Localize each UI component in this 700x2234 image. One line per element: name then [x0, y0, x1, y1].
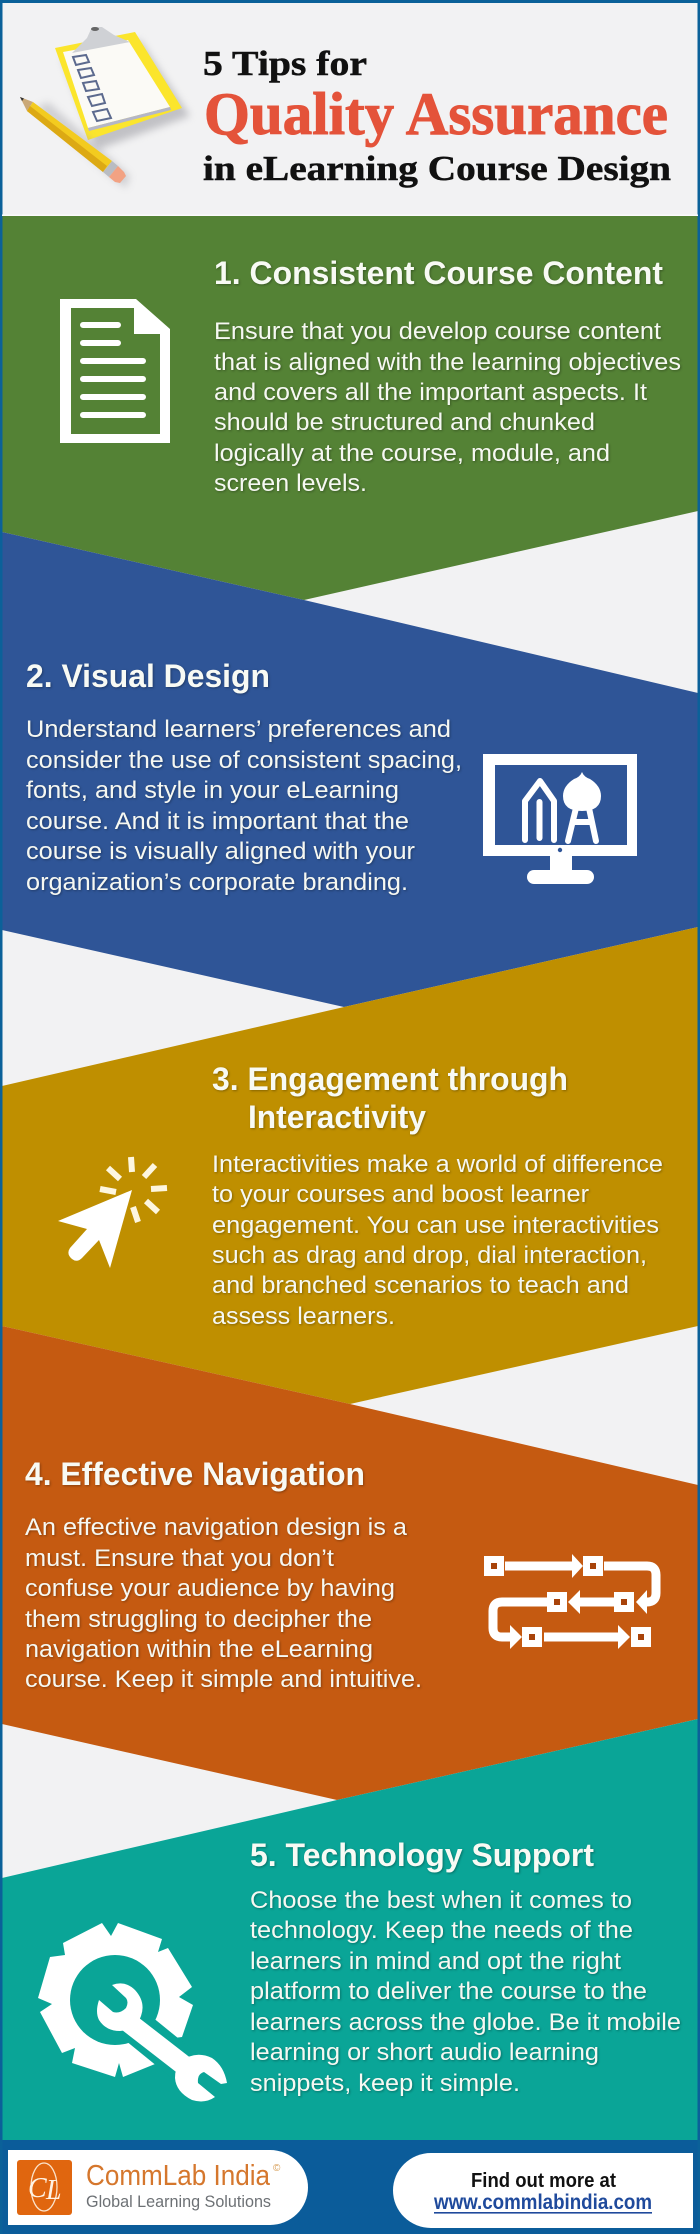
- text block: consider the use of consistent spacing,: [26, 747, 462, 774]
- icon: CL logo: [17, 2160, 72, 2215]
- text block: to your courses and boost learner: [212, 1181, 589, 1208]
- heading: Interactivity: [248, 1099, 426, 1135]
- text block: course. And it is important that the: [26, 808, 409, 835]
- text block: and covers all the important aspects. It: [214, 379, 647, 406]
- text block: snippets, keep it simple.: [250, 2070, 520, 2097]
- icon: monitor with pencil and pen: [483, 754, 637, 884]
- text block: engagement. You can use interactivities: [212, 1212, 659, 1239]
- heading: 3. Engagement through: [212, 1061, 568, 1097]
- panel: 2. visual design: [2, 532, 698, 1007]
- heading: [212, 1061, 568, 1135]
- logo panel: CommLab India: [86, 2160, 271, 2192]
- text block: [250, 1887, 681, 2097]
- icon: clipboard and pencil: [20, 27, 190, 188]
- heading: 4. Effective Navigation: [25, 1456, 365, 1492]
- text block: that is aligned with the learning objectives: [214, 349, 681, 376]
- text block: Choose the best when it comes to: [250, 1887, 632, 1914]
- text block: Ensure that you develop course content: [214, 318, 661, 345]
- icon: document: [60, 299, 170, 443]
- callout: find out more: www.commlabindia.com: [433, 2191, 652, 2214]
- text block: such as drag and drop, dial interaction,: [212, 1242, 647, 1269]
- text block: course is visually aligned with your: [26, 838, 415, 865]
- title: 5 Tips for: [203, 44, 367, 83]
- pencil: [36, 102, 130, 188]
- title: in eLearning Course Design: [203, 149, 671, 188]
- text block: [25, 1514, 422, 1693]
- text block: fonts, and style in your eLearning: [26, 777, 399, 804]
- text block: learning or short audio learning: [250, 2039, 599, 2066]
- title: Quality Assurance: [204, 81, 668, 147]
- text block: Interactivities make a world of difference: [212, 1151, 663, 1178]
- text block: Understand learners’ preferences and: [26, 716, 451, 743]
- heading: 2. Visual Design: [26, 658, 270, 694]
- text block: must. Ensure that you don’t: [25, 1545, 334, 1572]
- title: [203, 44, 671, 188]
- text block: navigation within the eLearning: [25, 1636, 373, 1663]
- text block: organization’s corporate branding.: [26, 869, 408, 896]
- text block: course. Keep it simple and intuitive.: [25, 1666, 422, 1693]
- icon: navigation flow: [484, 1554, 656, 1649]
- text block: screen levels.: [214, 470, 367, 497]
- panel: 1. consistent course content: [2, 216, 698, 600]
- text block: and branched scenarios to teach and: [212, 1272, 629, 1299]
- text block: confuse your audience by having: [25, 1575, 395, 1602]
- icon: gear and wrench: [38, 1923, 227, 2101]
- footer: [0, 2140, 700, 2234]
- heading: 5. Technology Support: [250, 1837, 594, 1873]
- text block: learners across the globe. Be it mobile: [250, 2009, 681, 2036]
- logo panel: Global Learning Solutions: [86, 2192, 271, 2211]
- logo panel: [8, 2150, 308, 2225]
- text block: [214, 318, 681, 497]
- icon: CL logo: L: [45, 2175, 62, 2206]
- panel: 3. engagement through interactivity: [2, 927, 698, 1404]
- icon: CL logo: C: [28, 2173, 47, 2204]
- text block: [26, 716, 462, 896]
- logo panel: ©: [273, 2163, 281, 2174]
- header: [20, 27, 671, 188]
- panel: 4. effective navigation: [2, 1326, 698, 1800]
- text block: should be structured and chunked: [214, 409, 595, 436]
- text block: An effective navigation design is a: [25, 1514, 408, 1541]
- text block: platform to deliver the course to the: [250, 1978, 647, 2005]
- text block: assess learners.: [212, 1303, 395, 1330]
- heading: 1. Consistent Course Content: [214, 255, 663, 291]
- panel: 5. technology support: [2, 1719, 698, 2140]
- callout: find out more: Find out more at: [471, 2170, 616, 2192]
- text block: logically at the course, module, and: [214, 440, 610, 467]
- text block: [212, 1151, 663, 1330]
- text block: learners in mind and opt the right: [250, 1948, 621, 1975]
- text block: technology. Keep the needs of the: [250, 1917, 633, 1944]
- icon: cursor click: [58, 1157, 167, 1268]
- callout: find out more: [393, 2153, 693, 2228]
- text block: them struggling to decipher the: [25, 1606, 372, 1633]
